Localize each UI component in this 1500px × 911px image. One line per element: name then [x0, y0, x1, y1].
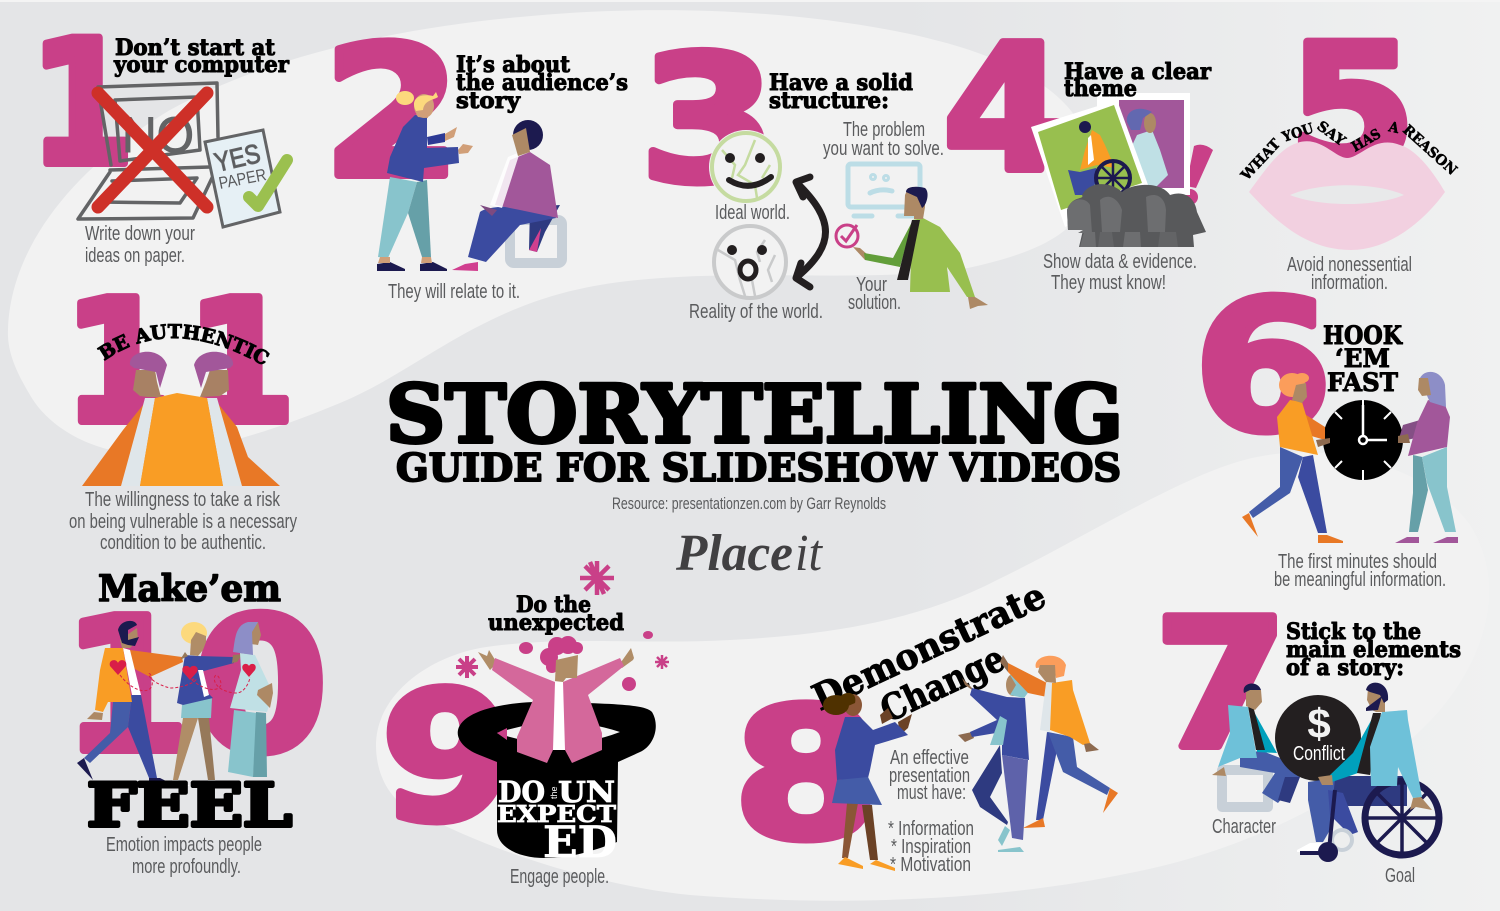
heading 9: unexpected [488, 610, 624, 636]
figure: woman in hijab [1395, 372, 1458, 543]
resource credit: Resource: presentationzen.com by Garr Reynolds [612, 494, 886, 513]
caption 1: ideas on paper. [85, 245, 185, 267]
panel: 7 main elements of a story [1154, 581, 1461, 887]
title: STORYTELLING [386, 367, 1123, 461]
icon: yes paper with check: YES [212, 138, 263, 178]
icon: yes paper with check [205, 130, 287, 227]
caption 1: Write down your [85, 223, 195, 245]
caption 8: * Motivation [890, 854, 971, 876]
heading 6 [1323, 321, 1403, 397]
heading 4: theme [1064, 76, 1137, 102]
heading 1: Don’t start at [115, 35, 276, 61]
panel: 11 be authentic [63, 264, 297, 554]
heading 4: Have a clear [1064, 59, 1211, 85]
caption: ideal world: Ideal world. [715, 202, 790, 224]
curved heading 5: YOU [1279, 121, 1316, 146]
caption 10: more profoundly. [132, 856, 241, 878]
number 2: 2 [323, 9, 461, 218]
heading 6: HOOK [1323, 321, 1403, 350]
icon: yes paper with check: PAPER [217, 165, 268, 193]
heading 2: the audience’s [456, 70, 628, 96]
panel: 4 clear theme [943, 8, 1213, 294]
figure: woman with hijab [228, 622, 273, 777]
curved heading 5: WHAT [1238, 136, 1284, 184]
caption 11 [69, 489, 297, 554]
figure: woman left [823, 693, 912, 871]
arrow: two-way curved [796, 177, 826, 287]
heading 2: It’s about [456, 52, 571, 78]
heading 6: FAST [1327, 368, 1398, 397]
number 8: 8 [733, 671, 879, 880]
number 1: 1 [29, 3, 135, 204]
figure: standing woman [377, 91, 473, 271]
heading 3 [769, 70, 913, 114]
figure: two-faced person [82, 352, 280, 486]
heading 9: Do the [516, 592, 591, 618]
heading 7: Stick to the [1286, 619, 1421, 645]
icon: conflict coin: Conflict [1293, 743, 1345, 765]
heading 1 [113, 35, 289, 78]
caption 8: An effective [890, 747, 969, 769]
curved heading 5: REASON [1399, 122, 1460, 179]
heading 3: Have a solid [769, 70, 913, 96]
heading 3: structure: [769, 88, 889, 114]
icon: confetti [456, 561, 669, 691]
heading 2 [456, 52, 628, 114]
caption 4: They must know! [1051, 272, 1166, 294]
number 9: 9 [381, 654, 515, 861]
figure: walking person [1242, 373, 1343, 543]
caption: your solution: Your [856, 274, 887, 296]
caption 10: Emotion impacts people [106, 834, 262, 856]
number 4: 4 [943, 8, 1067, 211]
heading 7: main elements [1286, 637, 1461, 663]
photo: pregnant woman [1097, 93, 1190, 195]
icon: magic hat with text: the [549, 786, 559, 799]
figure: woman emerging from hat [478, 636, 634, 763]
icon: lips [1249, 141, 1445, 250]
panel: 6 hook 'em fast [1194, 263, 1458, 591]
caption 8: * Information [888, 818, 974, 840]
caption: goal: Goal [1385, 865, 1415, 887]
figure: man with check [836, 187, 988, 309]
caption 11: The willingness to take a risk [85, 489, 281, 511]
caption: reality: Reality of the world. [689, 301, 823, 323]
number 11: 1 [186, 264, 296, 462]
curved heading 5: SAY [1314, 118, 1349, 150]
heading 2: story [456, 88, 521, 114]
icon: magic hat with text: EXPECT [497, 801, 616, 828]
heading 10 bottom: FEEL [87, 771, 292, 841]
heading 10 top: Make’em [98, 568, 281, 610]
icon: magic hat with text [458, 702, 656, 868]
icon: conflict coin: $ [1307, 700, 1331, 747]
caption 8 [888, 747, 974, 876]
curved heading 5 [1238, 118, 1460, 184]
number 10: 1 [62, 578, 191, 794]
caption 2: They will relate to it. [388, 281, 520, 303]
number 10 [62, 578, 328, 794]
number 11 [63, 264, 296, 462]
caption 1 [85, 223, 195, 267]
caption 6 [1274, 551, 1446, 591]
panel: 9 do the unexpected [381, 561, 669, 888]
figure: person with blue jacket [172, 622, 243, 786]
figure: man in orange jacket [77, 621, 183, 783]
caption 8: * Inspiration [891, 836, 971, 858]
panel: 10 make 'em feel [62, 568, 328, 878]
heading 1: your computer [113, 52, 289, 78]
number 7: 7 [1154, 581, 1288, 788]
caption: problem [823, 119, 944, 160]
icon: magic hat with text: DO [498, 775, 545, 809]
icon: conflict coin [1275, 695, 1361, 781]
caption: your solution [848, 274, 901, 314]
curved heading 11: BE AUTHENTIC [96, 324, 270, 364]
caption 10 [106, 834, 262, 878]
icon: exclamation mark [1182, 145, 1213, 205]
caption 4 [1043, 251, 1197, 294]
icon: hearts and dashed links [110, 660, 256, 693]
heading 8: Change [874, 637, 1011, 731]
heading 4 [1064, 59, 1211, 102]
figure: seated woman [452, 120, 562, 271]
number 3: 3 [640, 19, 776, 222]
logo: Placeit: it [795, 525, 823, 582]
caption 8: must have: [897, 782, 966, 804]
caption 9: Engage people. [510, 866, 609, 888]
heading 6: ‘EM [1335, 344, 1390, 373]
caption 11: condition to be authentic. [100, 532, 266, 554]
caption 5: information. [1311, 272, 1388, 294]
panel: 3 solid structure [640, 19, 988, 323]
figure: character [1212, 684, 1300, 807]
caption: problem: The problem [843, 119, 925, 141]
icon: crossed laptop [78, 83, 218, 219]
caption: character: Character [1212, 816, 1276, 838]
icon: crossed laptop: NO [122, 107, 194, 163]
caption 11: on being vulnerable is a necessary [69, 511, 297, 533]
curved heading 5: A [1386, 119, 1401, 137]
icon: magic hat with text: ED [543, 818, 617, 868]
icon: magic hat with text: UN [558, 775, 615, 809]
caption 8: presentation [889, 765, 970, 787]
caption: your solution: solution. [848, 292, 901, 314]
caption 4: Show data & evidence. [1043, 251, 1197, 273]
figure: goal man in wheelchair [1297, 683, 1439, 862]
icon: crowd silhouettes [1067, 184, 1206, 247]
number 5: 5 [1288, 7, 1416, 208]
figure: person orange jacket [1000, 655, 1118, 828]
icon: sad monitor [848, 164, 920, 216]
heading 7: of a story: [1286, 655, 1404, 681]
logo: Placeit: Place [675, 525, 793, 582]
caption: problem: you want to solve. [823, 138, 944, 160]
number 6: 6 [1194, 263, 1332, 472]
panel: 2 audience's story [323, 9, 628, 303]
title: GUIDE FOR SLIDESHOW VIDEOS [396, 445, 1121, 490]
heading 7 [1286, 619, 1461, 681]
number 10: 0 [193, 578, 328, 794]
caption 5 [1287, 254, 1412, 294]
panel: 8 demonstrate change [733, 575, 1118, 880]
number 11: 1 [63, 264, 173, 462]
panel: 5 what you say has a reason [1238, 7, 1460, 294]
heading 9 [488, 592, 624, 636]
heading 8: Demonstrate [806, 575, 1052, 719]
icon: shocked globe [714, 226, 786, 298]
icon: clock [1323, 400, 1403, 480]
caption 6: The first minutes should [1278, 551, 1437, 573]
panel: 1 don't start at your computer [29, 3, 289, 267]
icon: happy globe [709, 130, 783, 204]
curved heading 5: HAS [1349, 126, 1384, 155]
caption 5: Avoid nonessential [1287, 254, 1412, 276]
figure: person with hijab [958, 673, 1030, 852]
photo: man in wheelchair [1031, 100, 1151, 227]
